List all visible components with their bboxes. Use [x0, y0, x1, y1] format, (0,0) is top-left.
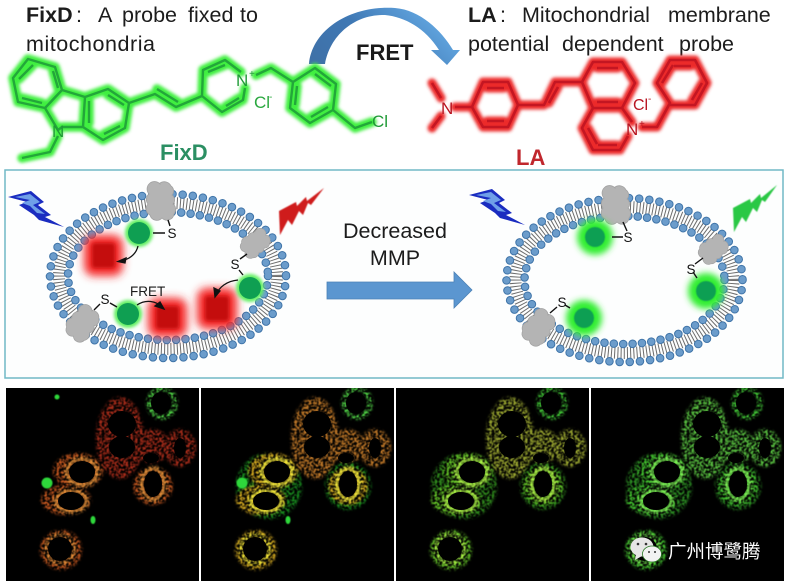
heading: FixD description: to [240, 3, 258, 27]
heading: FixD description: mitochondria [26, 32, 155, 56]
micrograph 2: orange yellow cells [201, 388, 394, 581]
green glowing probes: right [566, 219, 724, 336]
heading: FixD description: fixed [188, 3, 233, 27]
icon: blue excitation bolt left [8, 191, 64, 227]
icon: blue excitation bolt right [469, 189, 525, 225]
icon: green emission bolt [733, 185, 777, 232]
heading: FixD description: : [76, 3, 82, 27]
label: FRET: FRET [356, 40, 414, 65]
arrows: energy transfer [118, 246, 238, 309]
heading: LA description: potential [468, 32, 549, 56]
heading: LA description [468, 3, 771, 56]
heading: LA description: dependent [562, 32, 664, 56]
thiol linkers and S labels: left: S [167, 226, 177, 241]
heading: FixD description: probe [122, 3, 177, 27]
heading: FixD description: FixD [26, 3, 73, 27]
heading: FixD description [26, 3, 258, 56]
thiol linkers and S labels: right [550, 222, 703, 313]
watermark: company name: 广州博鹭腾 [668, 541, 761, 562]
red LA probes: left [84, 235, 237, 337]
molecule: FixD structure: + [249, 69, 255, 80]
heading: LA description: Mitochondrial [522, 3, 650, 27]
micrograph 1: red dominant cells [6, 388, 199, 581]
molecule: LA structure: N [626, 120, 638, 139]
heading: LA description: : [500, 3, 506, 27]
icon: red emission bolt [279, 188, 324, 235]
molecule: LA structure [432, 60, 707, 150]
molecule: LA structure: N [441, 99, 453, 118]
thiol linkers and S labels: right: S [686, 262, 696, 277]
proteins: right mitochondrion [517, 186, 732, 350]
molecule: LA structure: Cl [633, 97, 648, 114]
molecule: FixD structure [13, 59, 388, 158]
membrane: left mitochondrion [50, 194, 286, 358]
thiol linkers and S labels: left: S [100, 292, 110, 307]
molecule: FixD structure: N [236, 71, 248, 90]
heading: LA description: membrane [668, 3, 771, 27]
membrane: right mitochondrion [506, 198, 742, 362]
thiol linkers and S labels: right: S [557, 295, 567, 310]
molecule: LA structure: - [648, 94, 651, 105]
label: FRET small: FRET [130, 284, 165, 299]
green FixD probes: left [114, 219, 264, 328]
molecule: FixD structure: - [269, 92, 272, 103]
thiol linkers and S labels: left [94, 220, 247, 310]
molecule: FixD structure: Cl [254, 93, 270, 112]
label: Decreased MMP: MMP [370, 246, 420, 270]
heading: LA description: LA [468, 3, 497, 27]
arrow: decreased MMP transition [327, 272, 472, 308]
molecule: FixD structure: Cl [372, 112, 388, 131]
arrow: FRET curved arrow [309, 8, 460, 65]
thiol linkers and S labels: left: S [230, 257, 240, 272]
molecule: FixD structure: N [52, 122, 64, 141]
panel: mitochondria schematic [5, 170, 783, 378]
molecule: LA structure: + [639, 119, 645, 130]
label: Decreased MMP: Decreased [343, 219, 447, 243]
micrograph 4: green cells [591, 388, 784, 581]
heading: FixD description: A [98, 3, 113, 27]
label: FixD: FixD [160, 140, 208, 165]
label: Decreased MMP [343, 219, 447, 270]
watermark: WeChat icon [630, 538, 662, 562]
label: LA: LA [516, 145, 545, 170]
proteins: left mitochondrion [61, 182, 274, 346]
thiol linkers and S labels: right: S [623, 230, 633, 245]
heading: LA description: probe [679, 32, 734, 56]
micrograph 3: yellow green cells [396, 388, 589, 581]
